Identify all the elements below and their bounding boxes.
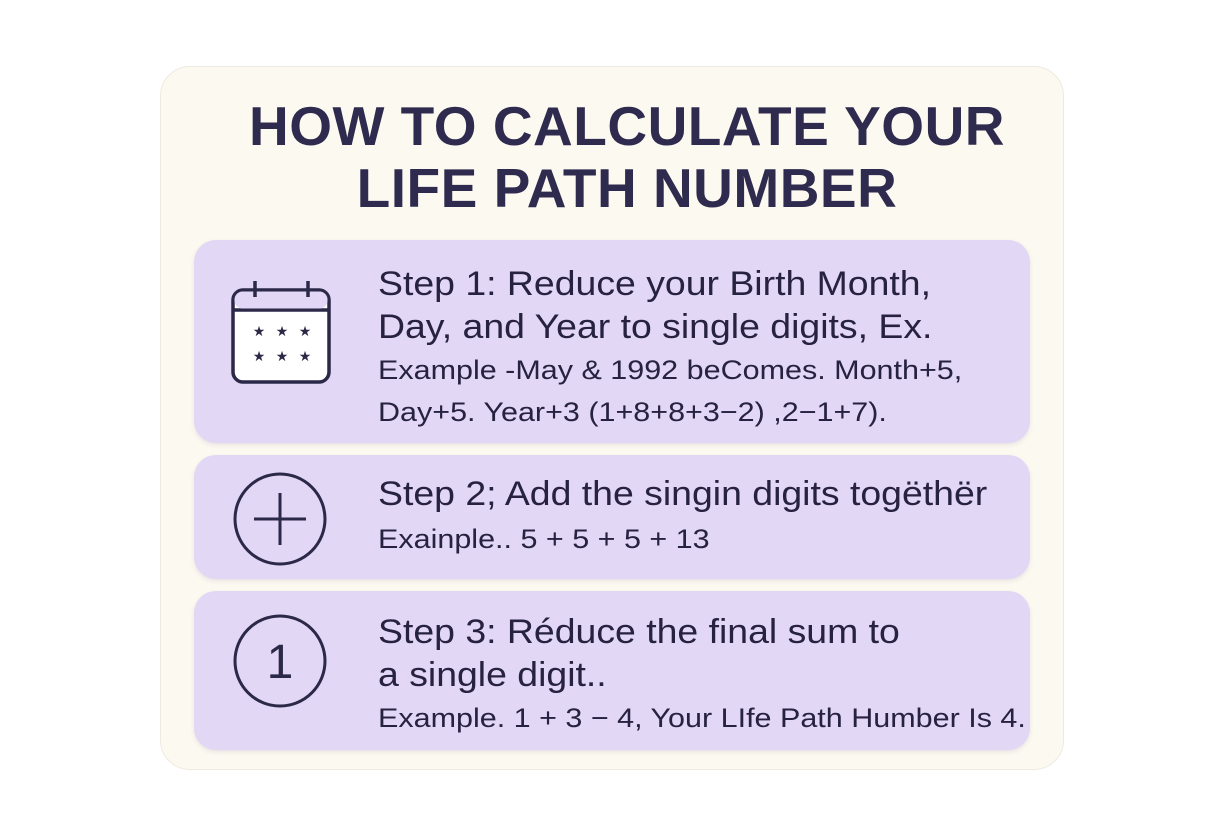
title: LIFE PATH NUMBER bbox=[357, 157, 897, 219]
panel: step 1: Day+5. Year+3 (1+8+8+3−2) ,2−1+7). bbox=[378, 397, 887, 427]
step 2 text: Step 2; Add the singin digits togëthër bbox=[378, 475, 987, 513]
step 1 text: Step 1: Reduce your Birth Month, bbox=[378, 265, 931, 303]
icon: calendar: ★ bbox=[276, 323, 288, 339]
icon: calendar: ★ bbox=[276, 348, 288, 364]
title bbox=[249, 95, 1005, 219]
icon: number one circle bbox=[234, 614, 326, 708]
panel: step 3: a single digit.. bbox=[378, 656, 607, 694]
panel: step 2: Exainple.. 5 + 5 + 5 + 13 bbox=[378, 524, 710, 554]
icon: calendar bbox=[231, 281, 331, 384]
panel: step 1: Example -May & 1992 beComes. Month+5, bbox=[378, 355, 962, 385]
panel: step 3: Example. 1 + 3 − 4, Your LIfe Path Humber Is 4. bbox=[378, 703, 1026, 733]
title: HOW TO CALCULATE YOUR bbox=[249, 95, 1005, 157]
icon: number one circle: 1 bbox=[267, 636, 293, 689]
icon: plus circle bbox=[234, 472, 326, 566]
icon: calendar: ★ bbox=[253, 348, 265, 364]
step 3 text: Step 3: Réduce the final sum to bbox=[378, 613, 900, 651]
icon: calendar: ★ bbox=[299, 323, 311, 339]
panel: step 1: Day, and Year to single digits, Ex. bbox=[378, 308, 932, 346]
panel: step 1 bbox=[194, 240, 1030, 443]
icon: calendar: ★ bbox=[253, 323, 265, 339]
panel: step 2 bbox=[194, 455, 1030, 579]
icon: calendar: ★ bbox=[299, 348, 311, 364]
panel: step 3 bbox=[194, 591, 1030, 750]
card background bbox=[160, 66, 1064, 770]
